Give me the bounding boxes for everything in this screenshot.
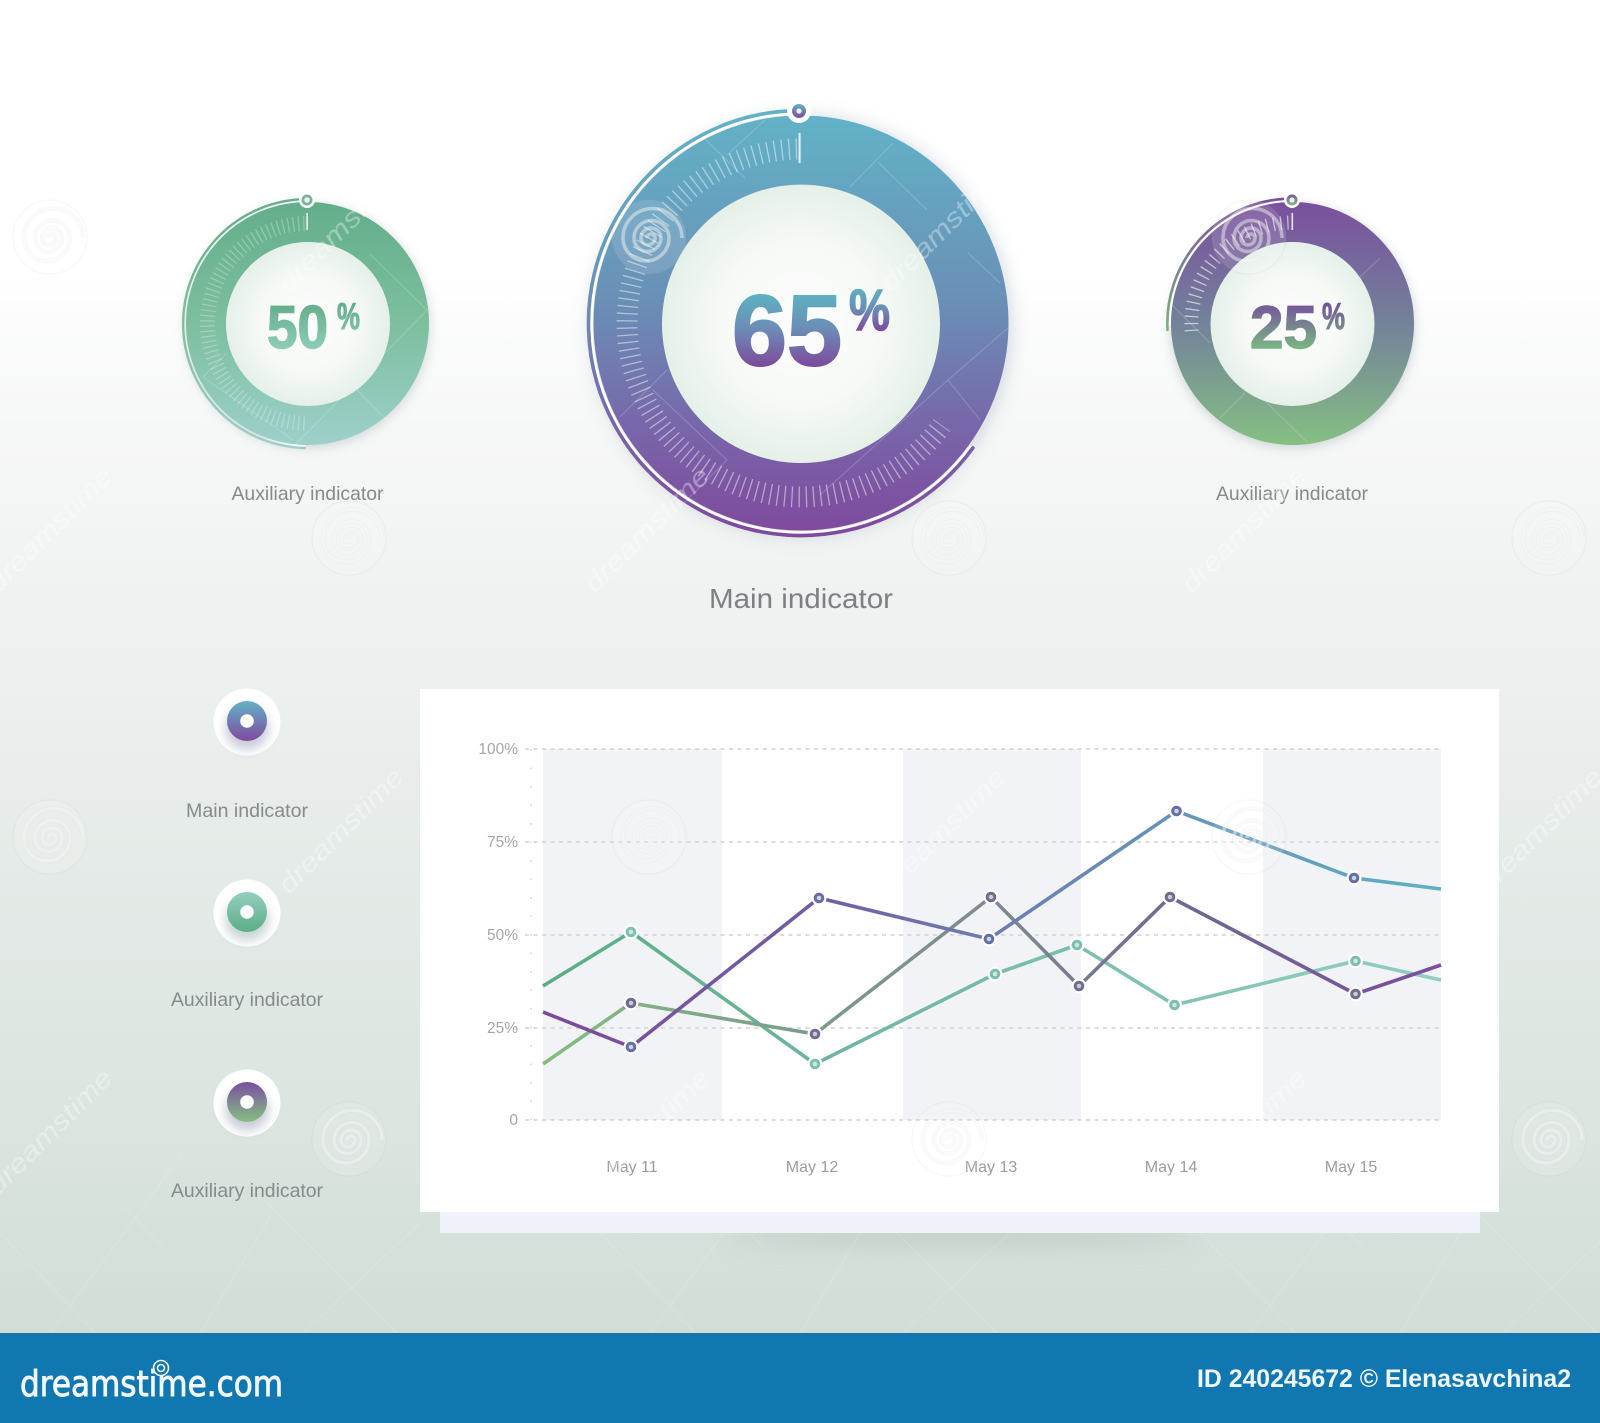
line series: main [543,811,1441,1047]
y axis labels: 50% [487,927,518,944]
panel: line chart card [420,689,1499,1212]
grid lines [525,749,1441,1120]
long start tick [799,133,801,163]
y axis labels: 25% [487,1020,518,1037]
white separator arc [190,202,305,446]
outer progress arc [183,199,305,448]
data points: auxiliary purple [624,890,1363,1042]
value: 50%: % [337,296,360,337]
chart column bands [543,749,1441,1120]
label: auxiliary indicator right: Auxiliary indicator [1216,483,1369,505]
panel: auxiliary indicator 50% donut [183,192,430,449]
donut ring [206,222,409,425]
watermark overlay: dreamstime [1175,461,1313,599]
icon: logo spiral [154,1360,168,1376]
footer bar [0,1333,1600,1423]
watermark overlay: dreamstime [874,160,1012,298]
white scale ticks [208,224,308,424]
x axis labels: May 14 [1145,1159,1197,1176]
watermark overlay: dreamstime [272,762,410,900]
y axis labels: 75% [487,834,518,851]
panel: main indicator donut [588,99,1011,536]
donut ring [628,150,974,496]
x axis labels [606,1159,1377,1176]
watermark overlay: dreamstime [1471,762,1600,900]
long start tick [1292,213,1293,230]
legend: auxiliary indicator green: Auxiliary indicator [171,989,324,1011]
image id and credit: ID 240245672 © Elenasavchina2 [1197,1365,1571,1393]
x axis labels: May 15 [1325,1159,1377,1176]
icon: green dot [227,892,267,932]
value: 25%: % [1322,296,1345,337]
knob [787,99,811,123]
y axis labels: 0 [509,1112,518,1129]
white scale ticks [1191,222,1292,331]
watermark overlay: dreamstime [1471,170,1600,308]
x axis labels: May 12 [786,1159,838,1176]
line series: auxiliary green [543,932,1441,1064]
legend: auxiliary indicator purple [171,1070,324,1202]
value: 65%: 65 [732,275,842,387]
label: main indicator: Main indicator [709,583,893,614]
watermark overlay: dreamstime [578,1063,716,1201]
watermark overlay: dreamstime [272,160,410,298]
white scale ticks [627,149,942,497]
knob [299,192,315,208]
x axis labels: May 13 [965,1159,1017,1176]
y axis labels [478,741,518,1129]
panel: auxiliary indicator 25% donut [1167,192,1416,449]
long start tick [306,213,308,230]
outer progress arc [1167,199,1283,330]
outer progress arc [588,111,973,536]
watermark overlay: dreamstime [874,762,1012,900]
white separator arc [1170,202,1290,325]
label: auxiliary indicator left: Auxiliary indicator [232,483,384,505]
y axis labels: 100% [478,741,518,758]
white separator arc [591,114,970,532]
value: 25%: 25 [1250,294,1317,361]
value: 50%: 50 [267,294,328,361]
knob [1284,192,1300,208]
legend: main indicator [186,688,309,822]
inner disc [662,185,940,463]
data points: auxiliary green [624,924,1363,1072]
data points: main [624,804,1362,1054]
donut ring [1191,222,1394,425]
inner disc [226,242,390,406]
legend: auxiliary indicator purple: Auxiliary indicator [171,1180,324,1202]
inner disc [1210,242,1374,406]
chart card shadow layer [440,1190,1480,1245]
footer logo text: dreamstime.com [20,1364,283,1405]
legend: main indicator: Main indicator [186,800,309,822]
value: 65%: % [849,278,890,343]
watermark overlay: dreamstime [1175,1063,1313,1201]
legend: auxiliary indicator green [171,880,324,1011]
line series: auxiliary purple [543,897,1441,1064]
x axis labels: May 11 [606,1159,658,1176]
icon: main dot [227,701,267,741]
icon: purple dot [227,1082,267,1122]
watermark overlay: dreamstime [578,461,716,599]
